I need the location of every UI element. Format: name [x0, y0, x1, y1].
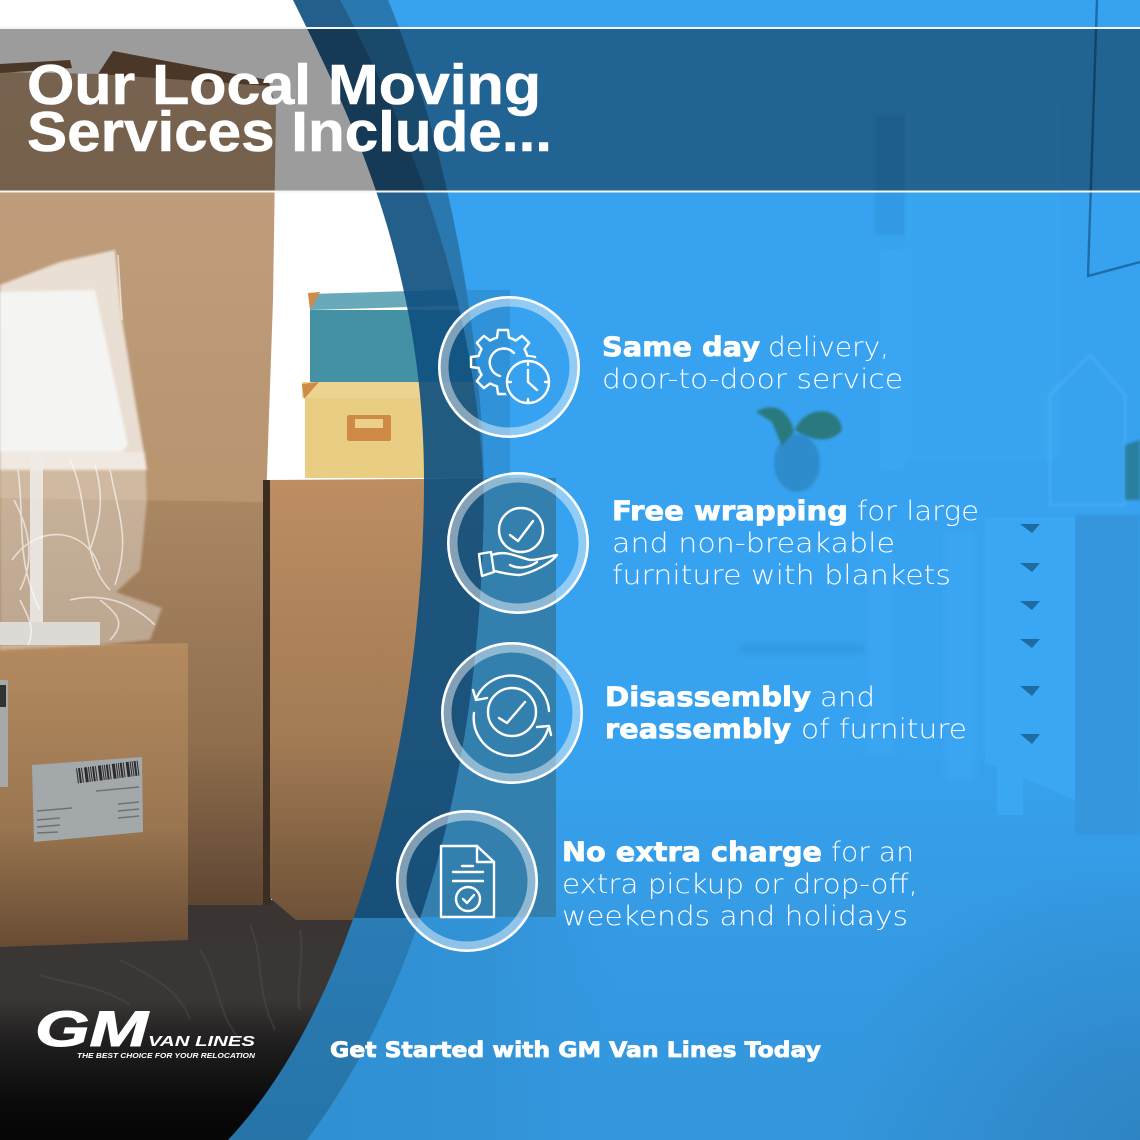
dark gap between boxes	[263, 480, 271, 905]
yellow storage box	[302, 382, 510, 478]
text 3: reassembly	[605, 714, 791, 745]
faded cabinet	[985, 515, 1140, 835]
text 1: door-to-door service	[602, 364, 903, 395]
call to action: Get Started with GM Van Lines Today	[330, 1038, 821, 1062]
text 1: Same day	[602, 332, 760, 363]
ring 4	[397, 811, 537, 951]
ring 2	[448, 473, 588, 613]
text 4: No extra charge	[562, 837, 822, 868]
text 2	[612, 496, 979, 591]
lamp wrapped in plastic	[0, 250, 162, 650]
text 4	[562, 837, 918, 932]
faded shelf	[876, 192, 904, 234]
text 4: weekends and holidays	[562, 901, 908, 932]
text 2: furniture with blankets	[612, 560, 951, 591]
faded poster frame	[1088, 0, 1140, 276]
logo: GM Van Lines: GM	[35, 1001, 150, 1057]
front cardboard box	[0, 643, 188, 947]
shipping label	[32, 757, 143, 842]
icon: hand with check	[479, 508, 557, 576]
text 3: of furniture	[801, 714, 967, 745]
box flap right	[98, 51, 270, 86]
teal storage box	[308, 288, 510, 382]
text 2: for large	[857, 496, 979, 527]
outer dark blue curve	[228, 0, 484, 1140]
middle blue curve	[340, 0, 484, 506]
text 2: Free wrapping	[612, 496, 848, 527]
icon: document with check	[441, 846, 494, 917]
logo: GM Van Lines: VAN LINES	[148, 1033, 255, 1050]
header rule bottom	[0, 190, 1140, 192]
header rule top	[0, 27, 1140, 29]
text 1: delivery,	[768, 332, 889, 363]
top cardboard box	[0, 72, 276, 502]
back cardboard box	[0, 498, 265, 905]
shade under box	[308, 917, 530, 1140]
faded plant	[756, 407, 842, 492]
text 3: Disassembly	[605, 682, 811, 713]
text 4: extra pickup or drop-off,	[562, 869, 918, 900]
faded small plant	[1125, 440, 1140, 500]
text 3	[605, 682, 967, 745]
title: Services Include...	[27, 100, 552, 164]
ring 3	[442, 643, 582, 783]
faded floor	[420, 740, 1140, 1140]
text 3: and	[820, 682, 875, 713]
icon: gear and clock	[471, 330, 549, 403]
text 1	[602, 332, 903, 395]
logo: GM Van Lines: THE BEST CHOICE FOR YOUR RELOCATION	[77, 1053, 256, 1060]
logo: GM Van Lines	[35, 1001, 256, 1060]
faded lantern	[1050, 355, 1125, 505]
service 1: same day delivery	[439, 297, 903, 437]
right cardboard box	[270, 478, 560, 920]
box flap left	[0, 60, 72, 73]
faded table legs	[742, 646, 863, 652]
title	[27, 53, 552, 164]
icon: circular arrows with check	[473, 676, 551, 756]
faded cardboard box	[420, 478, 556, 917]
floor corner shade	[933, 927, 1140, 1140]
text 4: for an	[831, 837, 914, 868]
service 2: free wrapping	[448, 473, 979, 613]
header band	[0, 29, 1140, 191]
floor	[0, 900, 560, 1140]
text 2: and non-breakable	[612, 528, 895, 559]
light blue panel with faded room	[307, 0, 1140, 1140]
faded upper boxes	[466, 290, 510, 478]
side label	[0, 680, 8, 787]
ring 1	[439, 297, 579, 437]
service 3: disassembly	[442, 643, 967, 783]
title: Our Local Moving	[27, 53, 541, 117]
service 4: no extra charge	[397, 811, 918, 951]
